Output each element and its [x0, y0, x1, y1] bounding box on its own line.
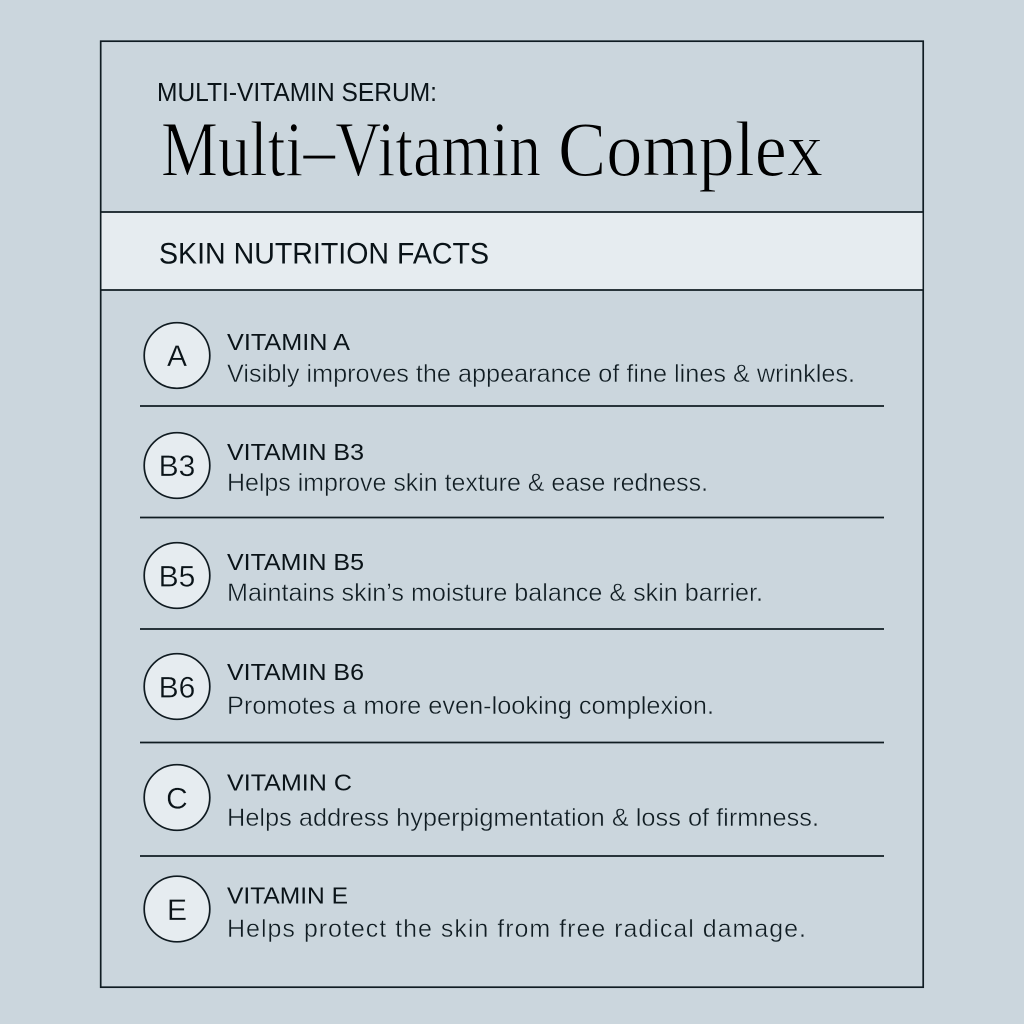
- icon: badge B6: B6: [159, 672, 195, 704]
- vitamin C description: Helps address hyperpigmentation & loss of firmness.: [227, 804, 819, 832]
- icon: badge B3: B3: [159, 450, 195, 483]
- icon: badge C: [144, 765, 210, 830]
- vitamin B3 name: VITAMIN B3: [227, 439, 364, 465]
- icon: badge A: [144, 323, 210, 388]
- icon: badge C: C: [166, 782, 188, 816]
- row: vitamin B6: [144, 654, 714, 720]
- vitamin B6 name: VITAMIN B6: [227, 659, 364, 685]
- vitamin E description: Helps protect the skin from free radical damage.: [227, 915, 806, 943]
- title: Multi–Vitamin: [161, 106, 541, 192]
- vitamin A description: Visibly improves the appearance of fine lines & wrinkles.: [227, 360, 855, 388]
- vitamin A name: VITAMIN A: [227, 329, 350, 355]
- icon: badge B6: [144, 654, 210, 719]
- frame panel: [101, 41, 923, 987]
- panel: section band: [100, 212, 924, 290]
- icon: badge E: E: [167, 894, 187, 927]
- eyebrow heading: MULTI-VITAMIN SERUM:: [157, 79, 437, 107]
- section heading: SKIN NUTRITION FACTS: [159, 238, 489, 270]
- vitamin E name: VITAMIN E: [227, 882, 348, 908]
- row: vitamin B5: [144, 543, 763, 608]
- row: vitamin B3: [144, 433, 708, 498]
- vitamin B6 description: Promotes a more even-looking complexion.: [227, 692, 714, 720]
- vitamin B5 name: VITAMIN B5: [227, 549, 364, 575]
- row: vitamin E: [144, 876, 806, 943]
- icon: badge B5: [144, 543, 210, 608]
- title: [161, 106, 823, 192]
- icon: badge B5: B5: [159, 560, 195, 594]
- icon: badge E: [144, 876, 210, 942]
- vitamin B5 description: Maintains skin’s moisture balance & skin barrier.: [227, 579, 763, 607]
- vitamin C name: VITAMIN C: [227, 770, 352, 796]
- title: Complex: [558, 106, 823, 192]
- row: vitamin A: [144, 323, 855, 388]
- vitamin B3 description: Helps improve skin texture & ease redness.: [227, 469, 708, 497]
- row: vitamin C: [144, 765, 819, 832]
- panel: header: [157, 79, 823, 192]
- icon: badge A: A: [167, 340, 187, 373]
- icon: badge B3: [144, 433, 210, 498]
